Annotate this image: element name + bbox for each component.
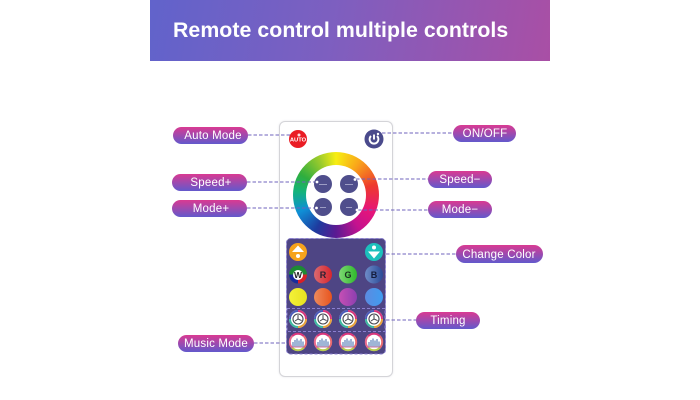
callout: ON/OFF <box>382 125 516 142</box>
music mode buttons <box>289 333 383 351</box>
colour buttons row: W R G B: G <box>344 270 352 280</box>
callout: Change Color <box>386 245 543 263</box>
icon: auto button: AUTO <box>290 138 307 144</box>
callout: Mode- <box>358 201 492 218</box>
colour buttons row: W R G B: B <box>371 270 378 280</box>
colour buttons row: W R G B: R <box>320 270 327 280</box>
callout: Speed+: Speed+ <box>190 177 232 189</box>
colour buttons row: W R G B: W <box>294 270 303 280</box>
title: Remote control multiple controls <box>173 18 508 42</box>
callout: Mode-: Mode− <box>442 204 478 216</box>
callout: Speed-: Speed− <box>439 174 481 186</box>
callout: Mode+ <box>172 200 316 217</box>
callout: Timing: Timing <box>430 315 466 327</box>
icon: colour up button <box>289 243 307 261</box>
callout: Speed- <box>356 171 492 188</box>
callout: Speed+ <box>172 174 316 191</box>
colour buttons row: plain colours <box>289 288 383 306</box>
button panel <box>286 238 386 354</box>
icon: auto button <box>289 130 307 148</box>
callout: Music Mode: Music Mode <box>184 338 248 350</box>
callout: Mode+: Mode+ <box>193 203 229 215</box>
speed and mode buttons <box>314 175 358 216</box>
icon: power button <box>364 130 384 148</box>
callout: ON/OFF: ON/OFF <box>463 128 507 140</box>
callout: Auto Mode <box>173 127 290 144</box>
callout: Change Color: Change Color <box>462 249 536 261</box>
callout: Auto Mode: Auto Mode <box>184 130 242 142</box>
colour buttons row: W R G B <box>289 266 383 284</box>
remote body <box>279 121 393 377</box>
header banner <box>150 0 550 61</box>
timing buttons <box>289 310 383 328</box>
callout: Music Mode <box>178 335 287 352</box>
colour wheel <box>293 152 379 238</box>
icon: colour down button <box>365 243 383 261</box>
callout: Timing <box>386 312 480 329</box>
